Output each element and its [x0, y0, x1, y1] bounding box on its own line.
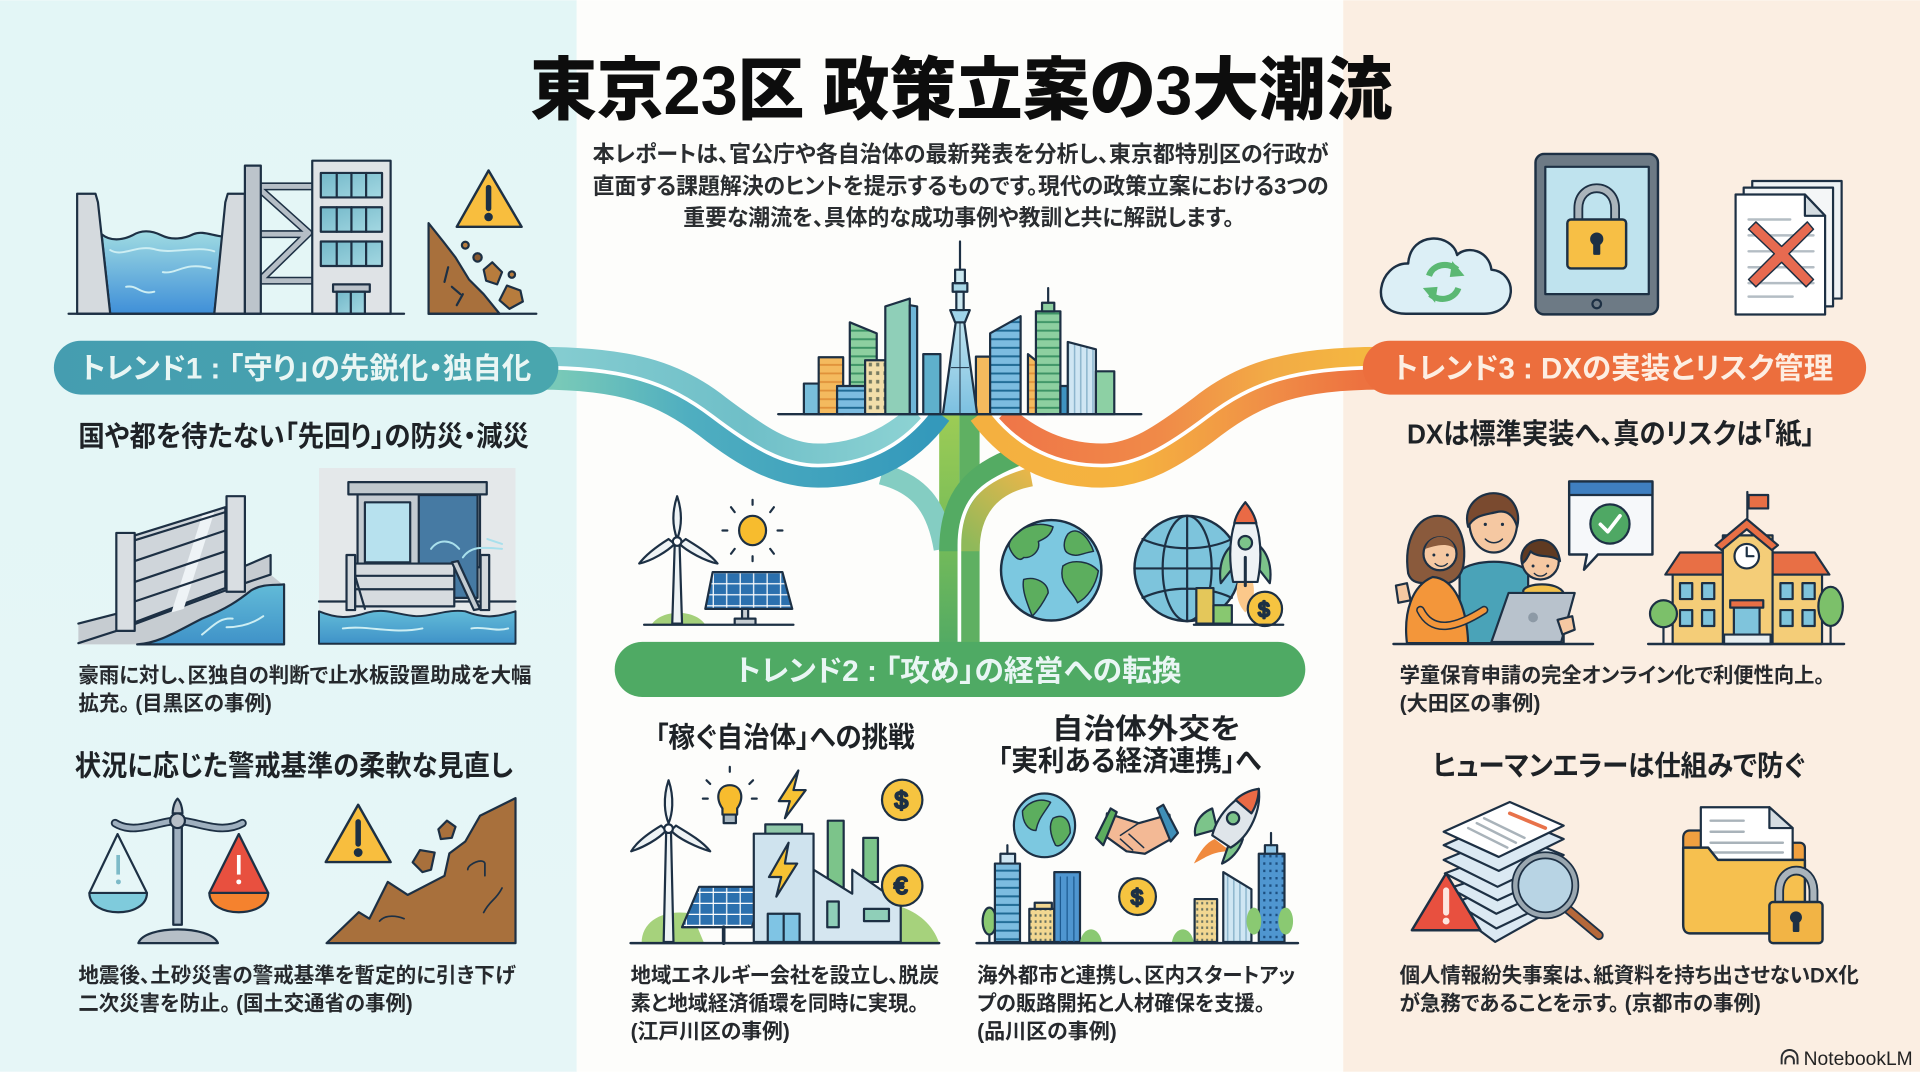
icon: warning and landslide: [429, 170, 536, 314]
heading: flexible alert criteria: 状況に応じた警戒基準の柔軟な見直し: [75, 750, 513, 781]
intro text: 本レポートは、官公庁や各自治体の最新発表を分析し、東京都特別区の行政が: [593, 141, 1329, 167]
heading: DX standard implementation: DXは標準実装へ、真のリスクは「紙」: [1407, 419, 1815, 450]
text: Kyoto case: が急務であることを示す。 (京都市の事例): [1400, 991, 1761, 1015]
heading: municipal diplomacy: 「実利ある経済連携」へ: [998, 745, 1262, 776]
icon: balance scale: [89, 799, 268, 943]
intro text: 直面する課題解決のヒントを提示するものです。現代の政策立案における3つの: [593, 173, 1329, 199]
NotebookLM logo: NotebookLM: [1804, 1049, 1913, 1070]
trend 1 label pill: トレンド1 : 「守り」の先鋭化・独自化: [81, 353, 531, 386]
panel: trend 2: [615, 496, 1305, 1044]
text: MLIT case: 地震後、土砂災害の警戒基準を暫定的に引き下げ: [78, 964, 516, 987]
flow ribbons connecting the three trends to the city: [539, 358, 1381, 647]
intro text: [593, 141, 1329, 231]
icon: dam, floodgate and building: [69, 161, 404, 314]
icon: earth, handshake, rocket and city: $: [1131, 885, 1143, 910]
text: Shinagawa case: [977, 963, 1296, 1044]
heading: municipal diplomacy: 自治体外交を: [1052, 714, 1240, 745]
text: Ota case: (大田区の事例): [1400, 691, 1540, 715]
panel: trend 3: [1363, 154, 1866, 1015]
trend 2 label pill: トレンド2 : 「攻め」の経営への転換: [736, 655, 1182, 688]
icon: earth: [1001, 520, 1101, 620]
text: Shinagawa case: (品川区の事例): [977, 1020, 1117, 1044]
trend 2 label pill: [615, 642, 1305, 697]
trend 1 label pill: [54, 341, 558, 395]
heading: earning municipality: 「稼ぐ自治体」への挑戦: [655, 722, 915, 753]
panel: trend 1: [54, 161, 558, 1015]
text: Shinagawa case: 海外都市と連携し、区内スタートアッ: [977, 963, 1296, 987]
text: Shinagawa case: プの販路開拓と人材確保を支援。: [977, 992, 1265, 1015]
icon: renewable energy factory: [631, 767, 939, 943]
icon: family using a tablet: [1393, 493, 1593, 644]
text: Meguro case: 豪雨に対し、区独自の判断で止水板設置助成を大幅: [78, 663, 531, 687]
icon: globe, rocket and coin: $: [1258, 599, 1270, 622]
text: MLIT case: 二次災害を防止。 (国土交通省の事例): [78, 991, 413, 1015]
text: Meguro case: [78, 663, 531, 715]
text: Kyoto case: [1400, 963, 1859, 1015]
icon: wind turbine, sun and solar panel: [639, 496, 793, 625]
trend 3 label pill: [1363, 341, 1866, 395]
icon: doorway flood barrier: [319, 468, 516, 644]
icon: globe, rocket and coin: [1134, 502, 1283, 626]
text: Ota case: [1400, 664, 1824, 715]
text: Edogawa case: 地域エネルギー会社を設立し、脱炭: [631, 964, 939, 987]
icon: paper stack, magnifier and warning: [1412, 802, 1599, 942]
icon: school building: [1648, 492, 1844, 644]
trend 3 label pill: トレンド3 : DXの実装とリスク管理: [1393, 353, 1833, 386]
text: Edogawa case: 素と地域経済循環を同時に実現。: [631, 992, 918, 1015]
icon: earth, handshake, rocket and city: [977, 789, 1298, 943]
text: Meguro case: 拡充。 (目黒区の事例): [78, 691, 272, 715]
text: Ota case: 学童保育申請の完全オンライン化で利便性向上。: [1400, 664, 1824, 687]
icon: cloud sync: [1381, 239, 1511, 314]
title: 東京23区 政策立案の3大潮流: [530, 52, 1392, 129]
text: Edogawa case: (江戸川区の事例): [631, 1020, 790, 1044]
icon: warning sign and landslide: [326, 798, 516, 943]
panel: center header: [530, 52, 1392, 414]
icon: locked folder: [1683, 807, 1823, 943]
heading: human error: ヒューマンエラーは仕組みで防ぐ: [1433, 750, 1805, 781]
icon: crossed out paper documents: [1736, 181, 1842, 314]
icon: Tokyo skyline with Skytree: [778, 242, 1141, 414]
text: Edogawa case: [631, 964, 939, 1044]
heading: municipal diplomacy: [998, 714, 1262, 776]
icon: flood wall: [78, 496, 284, 644]
heading: proactive disaster prevention: 国や都を待たない「先回り」の防災・減災: [78, 421, 529, 452]
text: Kyoto case: 個人情報紛失事案は、紙資料を持ち出させないDX化: [1400, 963, 1859, 987]
intro text: 重要な潮流を、具体的な成功事例や教訓と共に解説します。: [683, 205, 1234, 231]
icon: tablet with padlock: [1536, 154, 1658, 314]
icon: online application check: [1569, 482, 1652, 570]
icon: renewable energy factory: €: [894, 873, 908, 900]
text: MLIT case: [78, 964, 516, 1015]
icon: renewable energy factory: $: [894, 787, 908, 814]
